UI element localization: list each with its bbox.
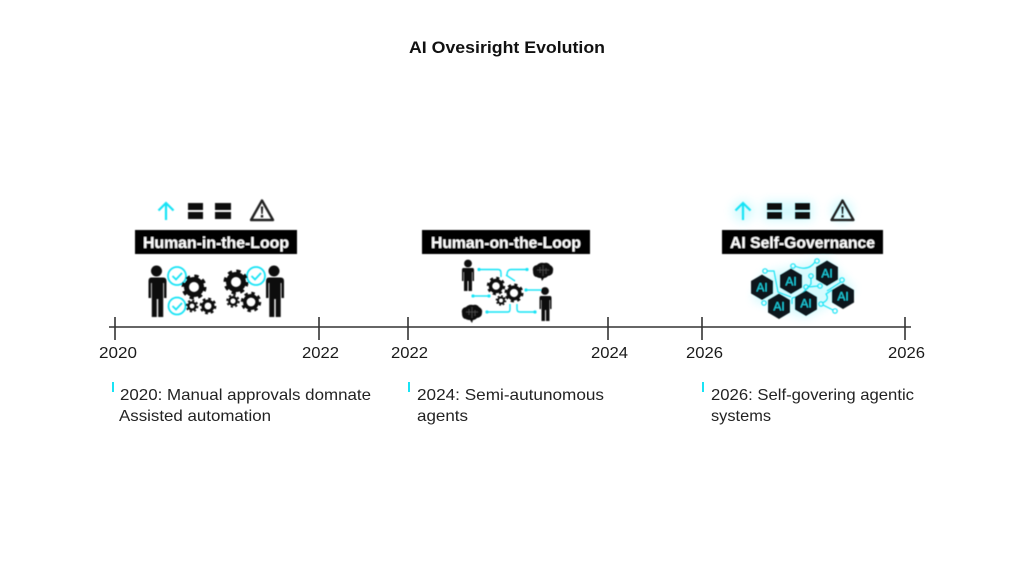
icon glow (732, 200, 856, 318)
icon: pause bars left (767, 203, 782, 219)
connector dots (471, 268, 537, 314)
panel: ai self-governance (722, 200, 883, 319)
heading box (722, 230, 883, 254)
icon: ai hexagons: AI (837, 290, 849, 304)
connector lines (473, 270, 541, 312)
icon: warning triangle (251, 200, 273, 220)
icon: brain top (533, 263, 553, 281)
icon: ai hexagons: AI (756, 280, 768, 294)
heading box (422, 230, 590, 254)
icon: person left (148, 266, 166, 317)
icon: gears left (183, 276, 215, 313)
title: AI Ovesiright Evolution (409, 39, 605, 57)
text block: 2024 (408, 382, 604, 425)
heading box (135, 230, 297, 254)
year labels: 2026 (686, 345, 723, 362)
icon: gears (488, 278, 522, 305)
icon: up arrow (158, 203, 174, 220)
year labels (99, 345, 925, 362)
icon: ai hexagons: AI (773, 300, 785, 314)
text block: 2020: Assisted automation (119, 408, 271, 425)
panel: human-on-the-loop (422, 230, 590, 323)
heading box: AI Self-Governance (730, 235, 875, 252)
icon: brain bottom (462, 305, 482, 323)
icon: gears right (225, 271, 260, 311)
icon: pause bars right (795, 203, 810, 219)
timeline axis (109, 317, 911, 340)
year labels: 2022 (391, 345, 428, 362)
icon: ai hexagons: AI (800, 296, 812, 310)
circuit lines (762, 259, 844, 313)
icon: up arrow (736, 203, 750, 220)
icon: check badges (168, 267, 265, 314)
year labels: 2020 (99, 345, 137, 362)
text block: 2024: 2024: Semi-autunomous (417, 387, 604, 404)
icon: ai hexagons: AI (821, 266, 833, 280)
icon: warning triangle (832, 200, 854, 220)
heading box: Human-in-the-Loop (143, 235, 289, 252)
icon: pause bars right (215, 203, 231, 219)
panel: human-in-the-loop (135, 200, 297, 317)
text block: 2026 (702, 382, 914, 425)
text block: 2024: agents (417, 408, 468, 425)
icon: person left (462, 260, 474, 291)
year labels: 2022 (302, 345, 339, 362)
text block: 2020 (112, 382, 371, 425)
year labels: 2026 (888, 345, 925, 362)
heading box: Human-on-the-Loop (431, 235, 581, 252)
text block: 2020: 2020: Manual approvals domnate (120, 387, 371, 404)
icon: pause bars left (188, 203, 203, 219)
icon: person right (540, 287, 552, 321)
icon: ai hexagons: AI (785, 274, 797, 288)
year labels: 2024 (591, 345, 628, 362)
icon: person right (266, 266, 284, 317)
text block: 2026: systems (711, 408, 771, 425)
icon: ai hexagons (751, 260, 854, 319)
text block: 2026: 2026: Self-govering agentic (711, 387, 914, 404)
